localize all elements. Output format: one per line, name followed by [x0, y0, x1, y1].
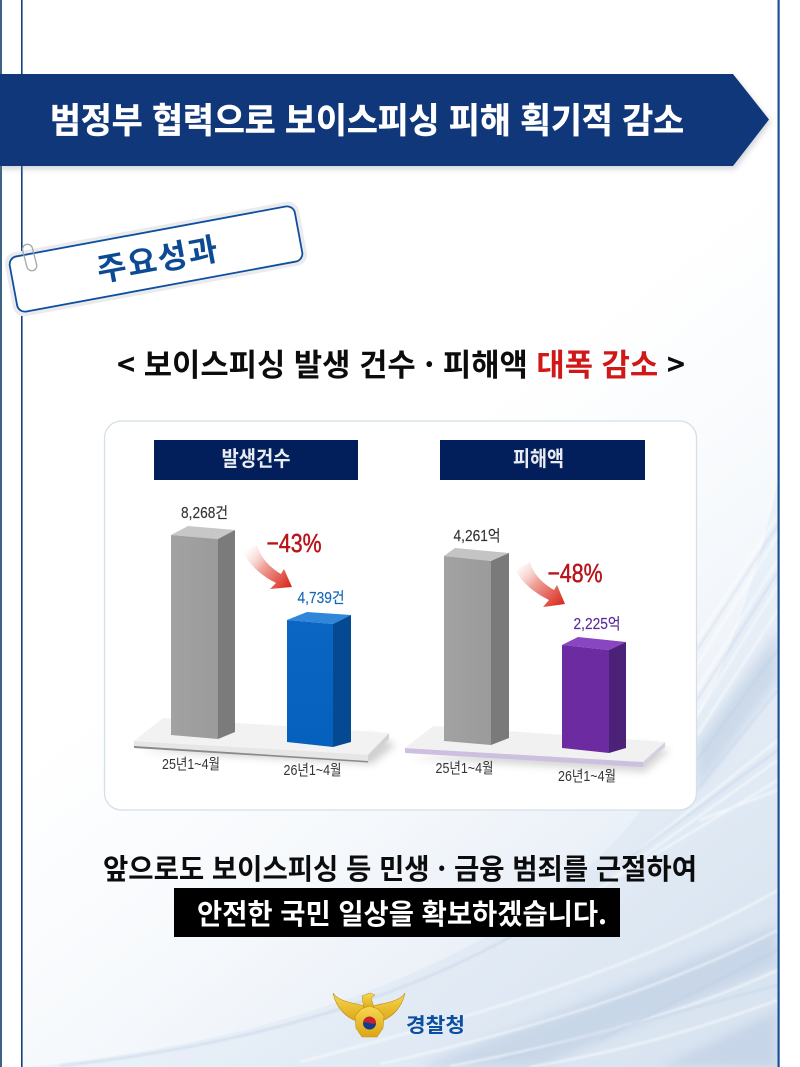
closing text line: 앞으로도 보이스피싱 등 민생 · 금융 범죄를 근절하여 — [103, 847, 697, 888]
tag: key results — [4, 195, 306, 315]
value labels: 26년1~4월 — [558, 768, 616, 785]
platform — [134, 718, 396, 764]
value labels: 25년1~4월 — [436, 760, 494, 777]
logo text: 경찰청 — [406, 1009, 465, 1038]
value labels — [162, 504, 344, 779]
value labels — [436, 527, 620, 785]
closing highlighted line: 안전한 국민 일상을 확보하겠습니다. — [197, 892, 607, 933]
value labels: 8,268건 — [181, 504, 228, 522]
chart header: cases — [154, 440, 358, 480]
chart header: damage — [440, 440, 645, 480]
logo: police emblem — [333, 993, 405, 1037]
bar: 2025 cases — [171, 526, 235, 739]
page background — [23, 455, 778, 1067]
bar: 2026 damage — [562, 637, 626, 753]
value labels: −43% — [266, 528, 322, 558]
chart: damage amount — [405, 440, 670, 785]
value labels: 2,225억 — [574, 615, 620, 633]
chart header: damage: 피해액 — [513, 443, 564, 473]
icon: paperclip — [21, 243, 38, 272]
value labels: 4,739건 — [298, 589, 344, 607]
bar: 2025 damage — [444, 548, 509, 745]
value labels: −48% — [548, 558, 602, 588]
arrow: decrease — [243, 545, 292, 589]
panel: chart card — [104, 421, 696, 810]
subheading: < 보이스피싱 발생 건수 · 피해액 대폭 감소 > — [117, 340, 685, 385]
title banner — [0, 74, 771, 169]
value labels: 25년1~4월 — [162, 756, 220, 773]
value labels: 26년1~4월 — [284, 762, 342, 779]
tag text: 주요성과 — [93, 224, 221, 292]
title text: 범정부 협력으로 보이스피싱 피해 획기적 감소 — [50, 93, 684, 144]
arrow: decrease — [516, 562, 565, 607]
chart header: cases: 발생건수 — [222, 443, 290, 473]
platform — [405, 726, 670, 772]
bar: 2026 cases — [287, 612, 351, 747]
chart: cases — [134, 440, 396, 779]
value labels: 4,261억 — [454, 527, 500, 545]
